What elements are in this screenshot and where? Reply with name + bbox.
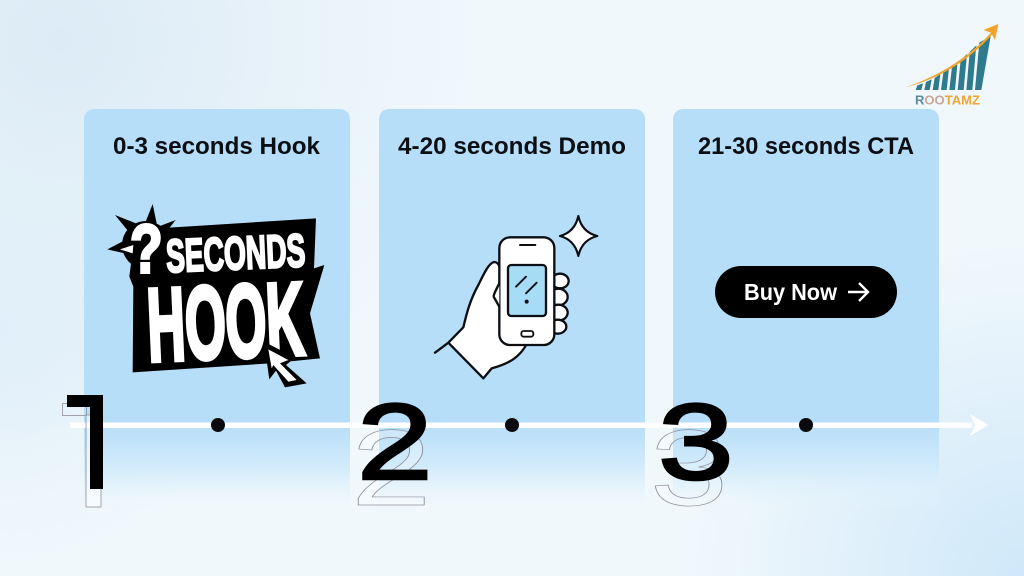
icon: seconds hook badge — [107, 204, 324, 387]
panel: CTA card — [673, 109, 939, 510]
heading: demo: 4-20 seconds Demo — [398, 133, 626, 160]
icon: hand holding phone — [435, 216, 597, 378]
number 2: 2 — [351, 408, 431, 529]
timeline dot 3 — [799, 418, 813, 432]
button: buy now: Buy Now — [744, 279, 838, 305]
panel: hook card — [84, 109, 350, 510]
number 2: 2 — [357, 382, 433, 503]
timeline dot 2 — [505, 418, 519, 432]
icon: seconds hook badge: SECONDS — [165, 224, 306, 282]
logo wordmark: ROOTAMZ — [915, 93, 980, 107]
panel: demo card — [379, 109, 645, 510]
number 1: 1 — [48, 369, 137, 518]
heading: hook: 0-3 seconds Hook — [113, 133, 321, 160]
number 1 — [62, 395, 103, 508]
logo bars — [916, 36, 991, 90]
logo: rootamz — [905, 24, 998, 107]
icon: seconds hook badge: HOOK — [145, 260, 306, 383]
icon: seconds hook badge: ? — [130, 212, 163, 288]
number 3: 3 — [658, 382, 734, 503]
icon: button arrow — [848, 283, 868, 301]
timeline arrow — [70, 414, 988, 436]
button: buy now — [715, 266, 897, 318]
timeline dot 1 — [211, 418, 225, 432]
number 3: 3 — [650, 408, 728, 528]
logo arrow — [905, 24, 998, 87]
heading: CTA: 21-30 seconds CTA — [698, 133, 914, 160]
